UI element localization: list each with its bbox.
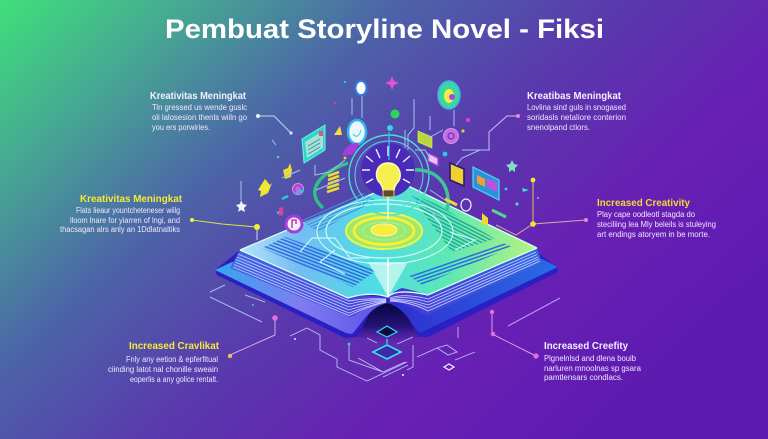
icon: small chips: [277, 190, 304, 213]
text block: top right callout: Kreatibas Meningkat: [527, 90, 621, 102]
text block: top right callout: [527, 90, 626, 132]
icon: monitor card: [473, 167, 499, 200]
connector: top right: [489, 114, 520, 150]
text block: middle right callout: steciliing lea Mly beleils is stuleying: [597, 220, 716, 229]
open book: [215, 182, 558, 338]
icon: yellow tag: [283, 163, 292, 179]
connector: top left: [256, 114, 293, 135]
icon: purple circle note: [286, 216, 302, 232]
icon: green dot: [390, 110, 400, 118]
text block: middle right callout: art endings atoryem in be morte.: [597, 230, 710, 239]
text block: top left callout: [150, 90, 248, 132]
lower circuit diamond: [373, 345, 401, 359]
circuit diagram below the book: [290, 326, 475, 381]
icon: purple badge: [292, 184, 304, 194]
connector: middle right: [496, 178, 588, 235]
icon: green bar: [492, 210, 506, 217]
icon: blue round chat: [348, 120, 366, 144]
text block: top left callout: you ers porwiries.: [152, 123, 210, 132]
floating icons around the bulb: [236, 76, 539, 232]
icon: small yellow star: [334, 126, 342, 135]
text block: middle right callout: [597, 197, 716, 239]
text block: top right callout: Lovlina sind guls in snogased: [527, 103, 626, 112]
page top surface: [240, 182, 537, 298]
icon: yellow green note: [418, 131, 432, 148]
right page blue text lines: [408, 243, 512, 285]
connector: bottom left: [210, 285, 278, 358]
icon: clipboard: [450, 163, 464, 186]
icon: yellow bars: [445, 199, 457, 205]
text block: bottom right callout: narluren mnoolnas sp gsara: [544, 364, 642, 373]
icon: dashboard card: [302, 125, 325, 163]
connector: bottom right: [490, 298, 560, 359]
icon: small dots: [277, 81, 539, 199]
icon: yellow star cluster: [258, 179, 272, 197]
text block: middle left callout: Flats lieaur yountcheteneser wiilg: [76, 206, 180, 215]
icon: rainbow disc: [438, 81, 460, 109]
upper left text lines: [300, 192, 376, 232]
text block: top left callout: Kreativitas Meningkat: [150, 90, 246, 102]
icon: white ring: [461, 199, 471, 211]
upper circuit diamond: [377, 326, 397, 337]
left page text lines: [262, 237, 377, 287]
text block: middle left callout: Kreativitas Meningkat: [80, 193, 182, 205]
lightbulb with halo: [315, 135, 448, 220]
text block: middle right callout: Increased Creativity: [597, 197, 690, 209]
left cover top band: [215, 262, 387, 334]
light fan at spine: [368, 262, 408, 297]
text block: bottom right callout: [544, 340, 642, 382]
text block: middle left callout: [60, 193, 182, 234]
icon stems and wires: [241, 96, 490, 222]
right page teal text lines: [410, 193, 495, 252]
icon: top blue ring: [356, 81, 366, 95]
text block: bottom right callout: pamtlensars condlacs.: [544, 373, 623, 382]
text block: middle left callout: thacsagan alrs anly an 1Ddlatnaltiks: [60, 225, 180, 234]
text block: bottom left callout: ciinding latot nal chonille sweain: [108, 365, 218, 374]
icon: cyan dot with stem: [387, 125, 393, 160]
text block: bottom left callout: Increased Cravlikat: [129, 340, 219, 352]
icon: pink sparkle: [385, 76, 399, 90]
text block: bottom right callout: Increased Creefity: [544, 340, 628, 352]
icon: white star: [236, 200, 247, 212]
title: Pembuat Storyline Novel - Fiksi: [165, 14, 604, 44]
circuit traces on page: [300, 232, 475, 274]
connector: middle left: [190, 218, 260, 240]
bulb base: [383, 190, 394, 197]
left page stack: [230, 250, 387, 317]
book cover base: [215, 250, 558, 338]
icon: sparkles: [515, 188, 529, 206]
text block: top right callout: soridasls netaliore conterion: [527, 113, 626, 122]
text block: bottom right callout: Plgnelnlsd and dlena bouib: [544, 354, 637, 363]
text block: bottom left callout: eoperlis a any golice rentalt.: [130, 375, 218, 384]
text block: middle right callout: Play cape oodleotl stagda do: [597, 210, 696, 219]
concentric energy rings: [317, 200, 453, 264]
icon: yellow lines stack: [327, 172, 339, 192]
icon: pink note: [428, 153, 438, 166]
text block: top right callout: snenolpand ctiors.: [527, 123, 590, 132]
page edge lines: [233, 252, 540, 316]
bulb: [376, 163, 400, 190]
text block: middle left callout: lloom lnare for yiarren of lngi, and: [70, 216, 180, 225]
icon: yellow pin: [482, 213, 488, 226]
icon: purple circle: [444, 128, 458, 144]
text block: top left callout: Tin gressed us wende guslc: [152, 103, 247, 112]
icon: purple leaf: [342, 143, 358, 155]
text block: bottom left callout: [108, 340, 219, 384]
right page stack: [388, 248, 542, 315]
icon: pink chip: [279, 207, 283, 216]
text block: top left callout: oli lalosesion thenls wiiln go: [152, 113, 248, 122]
spine line: [387, 258, 389, 297]
text block: bottom left callout: Fnly any eetion & epferfitual: [126, 355, 218, 364]
icon: pale green star: [506, 160, 518, 172]
right cover top band: [387, 258, 558, 333]
page rims: [240, 182, 537, 298]
notch shadow under book spine: [352, 303, 422, 345]
